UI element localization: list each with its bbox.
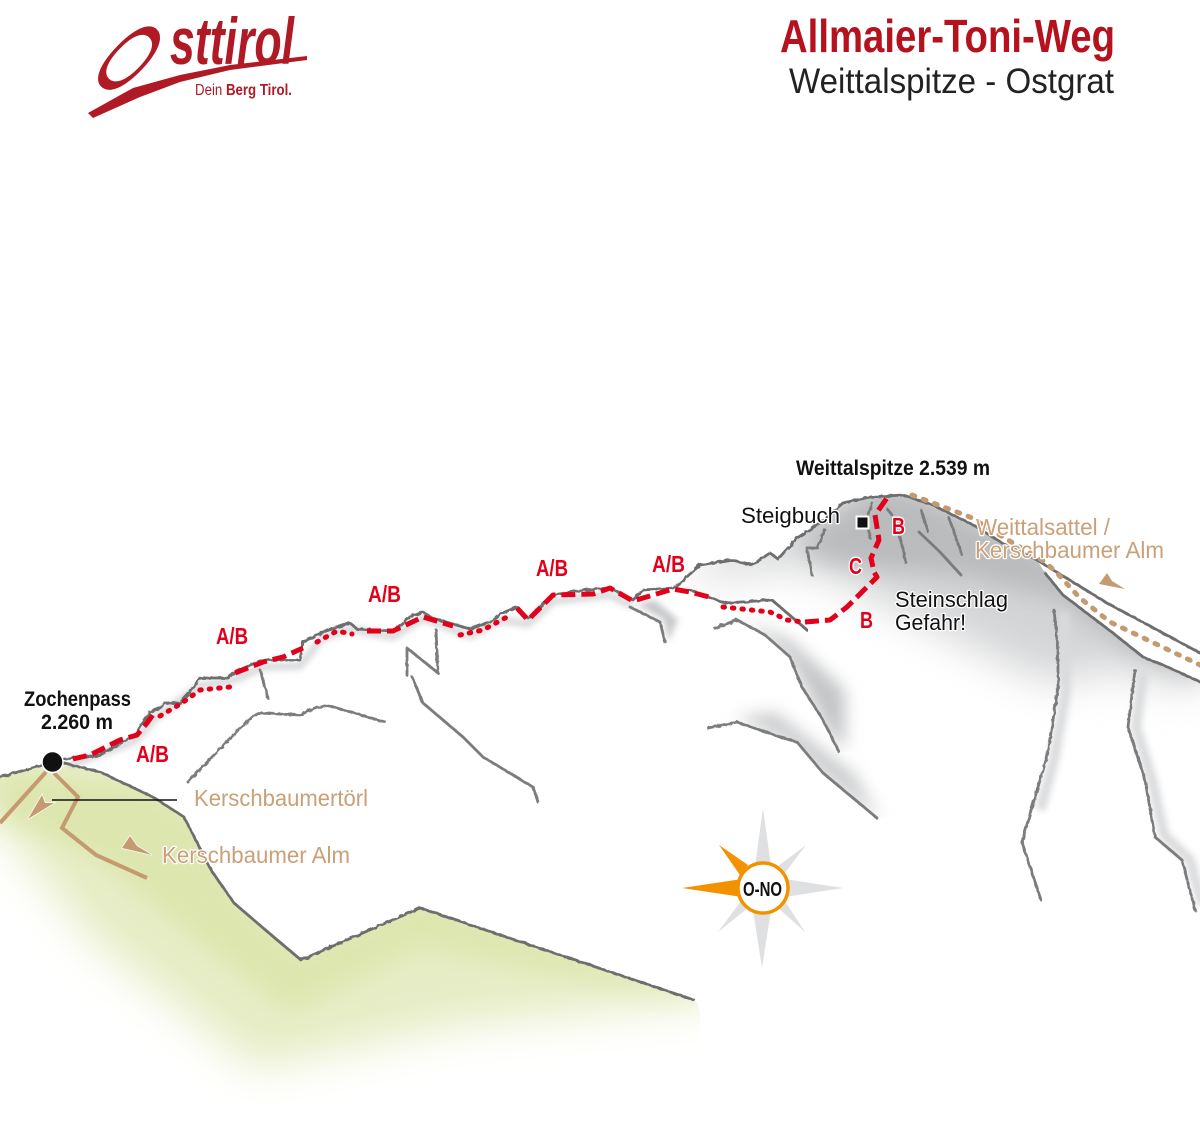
icon: Steigbuch marker — [856, 516, 868, 528]
logo: Osttirol — [78, 4, 307, 118]
compass — [682, 808, 843, 968]
summit shelf and lower summit ridge — [690, 573, 1200, 682]
arrows: trail direction — [28, 573, 1125, 855]
ridge shadow under the main ridge — [70, 595, 633, 765]
subtitle: Weittalspitze - Ostgrat — [789, 62, 1114, 101]
lower ridge line at Zochenpass — [0, 763, 694, 1000]
label: Kerschbaumertörl: Kerschbaumertörl — [194, 785, 368, 811]
grade labels: B — [892, 513, 905, 539]
label: Zochenpass: 2.260 m — [41, 711, 113, 734]
grade labels: A/B — [368, 581, 401, 607]
label: Weittalsattel — [975, 514, 1164, 563]
icon: Zochenpass point — [42, 752, 63, 772]
label: Steinschlag Gefahr: Gefahr! — [895, 610, 966, 635]
pointer line to Kerschbaumertörl — [52, 799, 177, 801]
grade labels — [136, 513, 905, 767]
rock lines — [0, 495, 1200, 1000]
grade labels: B — [860, 607, 873, 633]
label: Steigbuch: Steigbuch — [741, 503, 840, 528]
label: Zochenpass: Zochenpass — [24, 688, 131, 711]
grade labels: A/B — [536, 555, 568, 581]
grade labels: A/B — [216, 623, 248, 649]
grade labels: A/B — [136, 741, 169, 767]
label: Steinschlag Gefahr: Steinschlag — [895, 587, 1008, 612]
compass: O-NO — [743, 879, 782, 901]
label: Zochenpass — [24, 688, 131, 734]
logo: Osttirol: Dein Berg Tirol. — [195, 82, 292, 99]
panel: grey rock shading of the summit — [636, 480, 1200, 905]
label: Steinschlag Gefahr — [895, 587, 1008, 635]
label: Weittalsattel: Kerschbaumer Alm — [975, 537, 1164, 563]
label: Weittalspitze summit: Weittalspitze 2.539 m — [796, 456, 990, 480]
logo: Osttirol: sttirol — [170, 4, 295, 78]
label: Kerschbaumer Alm: Kerschbaumer Alm — [162, 842, 350, 868]
title: Allmaier-Toni-Weg — [780, 10, 1115, 62]
trail: Weittalsattel descent — [912, 495, 1200, 665]
main ridge line — [64, 495, 1200, 759]
route: red climbing line — [73, 498, 887, 759]
panel: green meadow shading — [0, 740, 720, 1068]
label: Weittalsattel: Weittalsattel / — [976, 514, 1111, 540]
logo: Osttirol: O — [78, 7, 180, 109]
rock ribs and gullies — [188, 503, 1195, 910]
trails to Kerschbaumer Alm — [0, 772, 147, 878]
grade labels: C — [849, 553, 862, 579]
grade labels: A/B — [652, 551, 685, 577]
